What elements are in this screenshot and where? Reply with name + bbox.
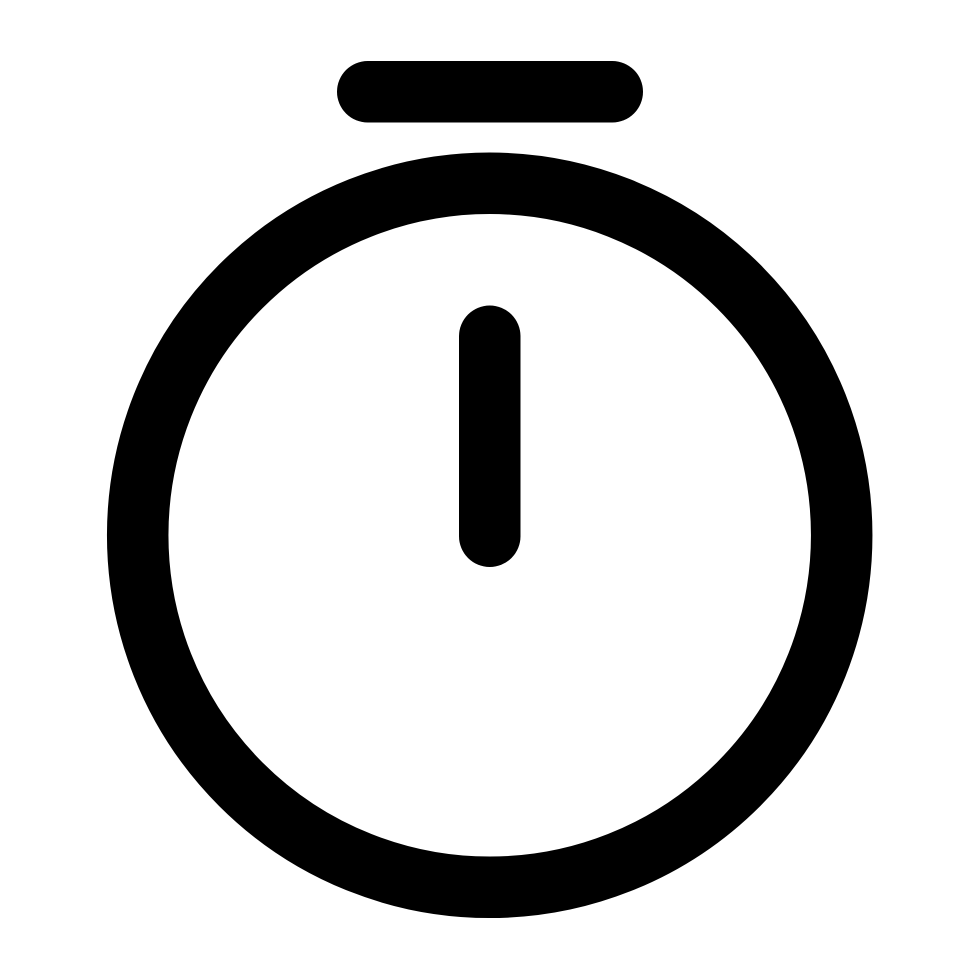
stopwatch top button <box>337 61 643 122</box>
stopwatch body ring <box>138 183 842 887</box>
stopwatch hand <box>459 306 520 567</box>
